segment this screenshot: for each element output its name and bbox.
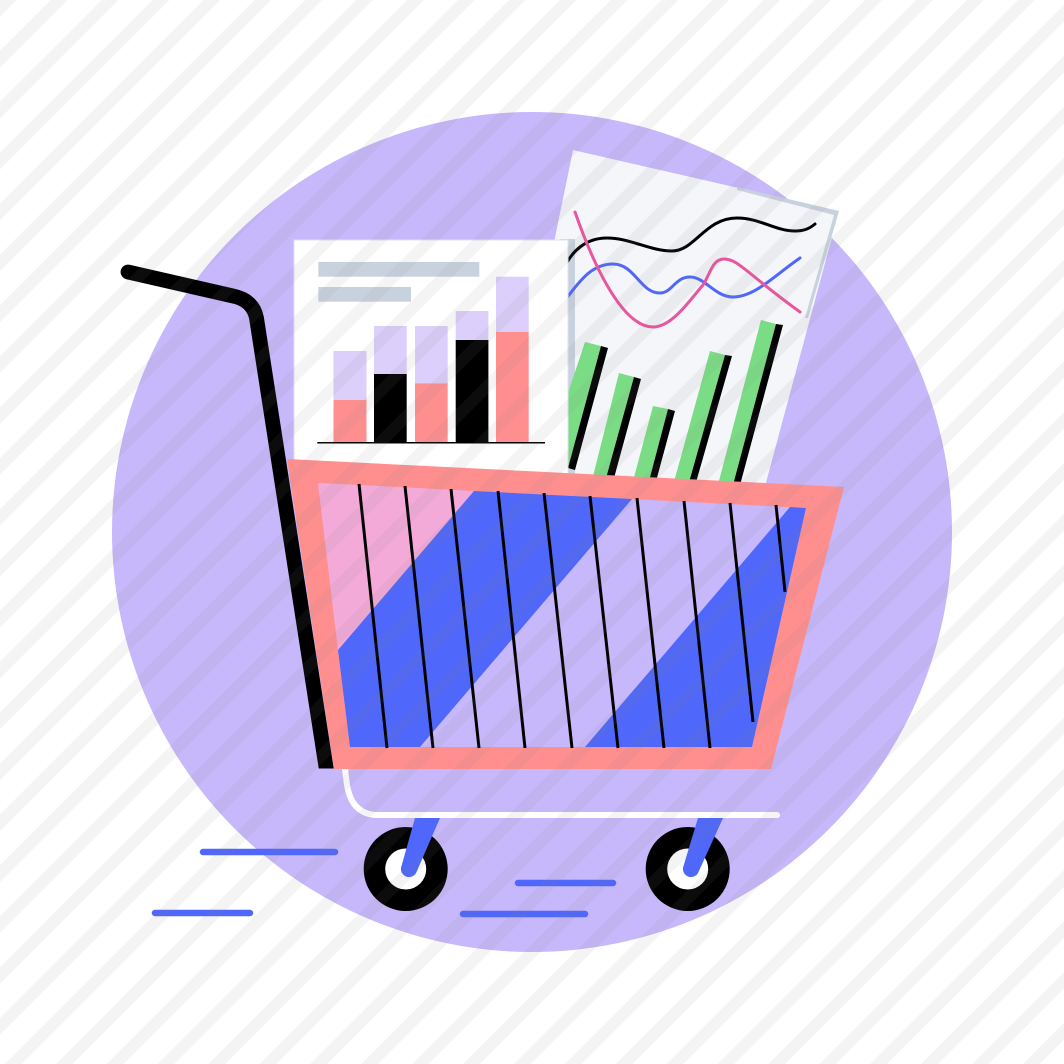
bar 1 (543, 342, 608, 470)
black line (565, 218, 815, 266)
basket wires (359, 484, 785, 748)
pink line (575, 212, 800, 327)
bar 4 (669, 351, 732, 500)
cart handle (128, 272, 328, 780)
blue band left (338, 491, 632, 747)
heading placeholder (318, 262, 479, 277)
bar 4 (456, 311, 488, 443)
sheet grey edge (737, 187, 839, 318)
bar 3 (628, 406, 675, 500)
left wheel (364, 818, 448, 911)
subheading placeholder (318, 287, 411, 302)
bar 5 (496, 277, 529, 443)
basket window lilac (318, 483, 806, 747)
front sheet shadow edge (560, 239, 575, 479)
back report sheet (500, 150, 839, 505)
purple circle (112, 112, 952, 952)
stacked bar chart (317, 277, 545, 444)
green bar chart (543, 320, 783, 500)
chassis (345, 769, 777, 815)
front report sheet (294, 240, 568, 480)
bar 5 (714, 320, 783, 500)
line chart (565, 212, 815, 327)
right wheel (646, 818, 730, 911)
speed lines (155, 852, 613, 914)
baseline (317, 442, 545, 444)
sheet paper (294, 240, 568, 480)
bar 2 (587, 373, 641, 500)
sheet paper (500, 150, 839, 505)
bar 3 (415, 326, 448, 443)
basket frame (287, 459, 844, 769)
cart basket (287, 459, 844, 769)
blue band right (585, 507, 806, 747)
bar 2 (374, 326, 407, 443)
bar 1 (334, 351, 366, 443)
pink panel (318, 483, 474, 650)
blue line (565, 258, 800, 300)
